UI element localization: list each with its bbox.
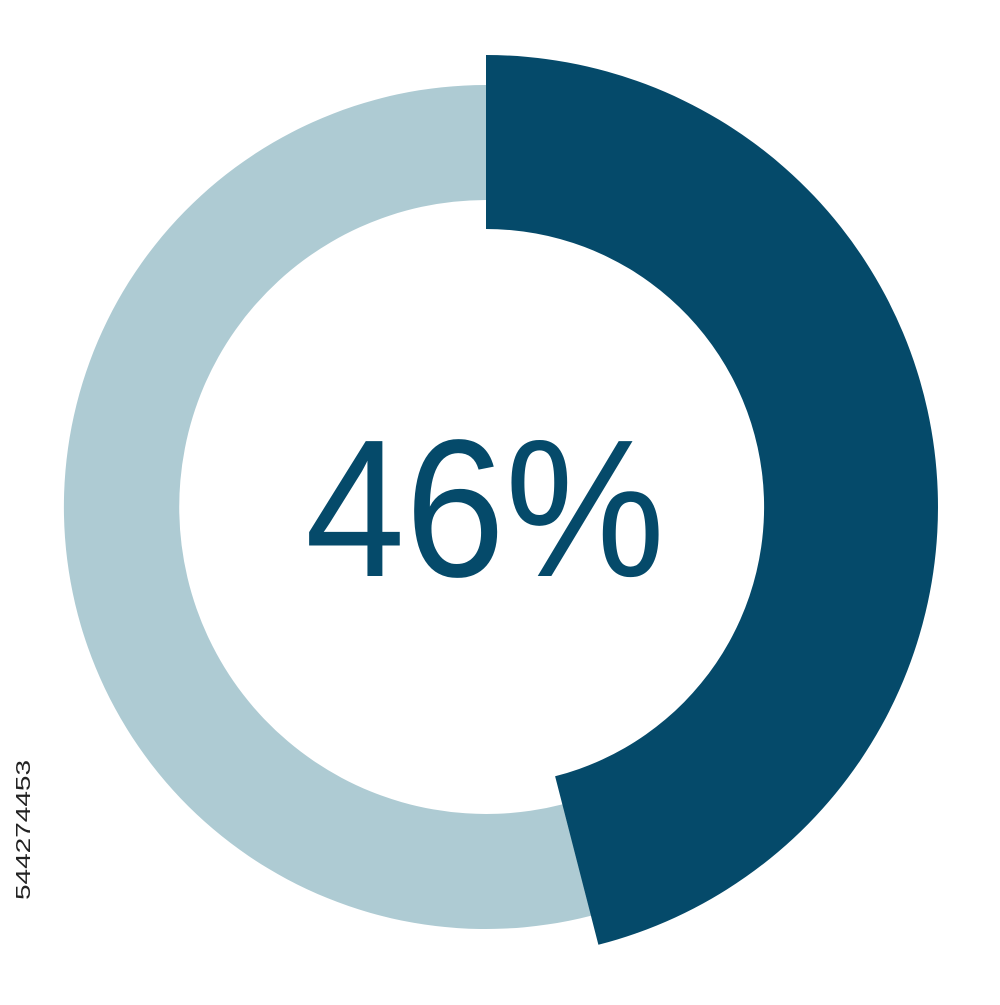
stock id text: 544274453 xyxy=(13,760,35,900)
donut remainder segment (54%) xyxy=(64,85,591,929)
donut highlighted segment (46%) xyxy=(486,55,938,945)
percentage label: 46% xyxy=(305,399,665,618)
